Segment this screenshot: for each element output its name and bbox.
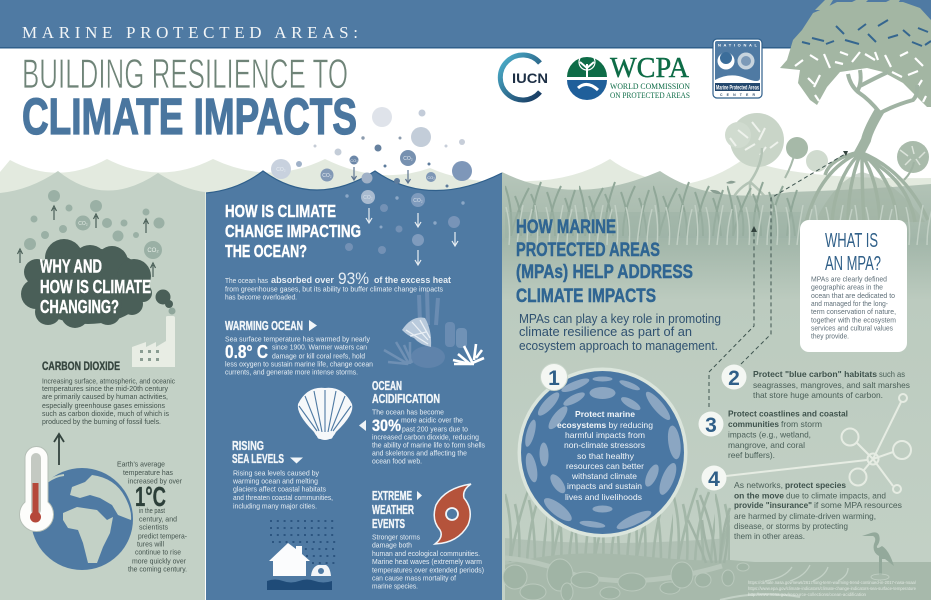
icon: flooded house xyxy=(267,521,336,590)
badge: 1: 1 xyxy=(548,367,560,390)
text: rising sea levels: glaciers affect coastal habitats xyxy=(233,484,326,494)
arrow: dashed line to grass xyxy=(709,154,845,407)
text: ocean acidification: The ocean has become xyxy=(372,408,444,416)
text: rising sea levels xyxy=(232,439,333,510)
icon: heron xyxy=(862,532,894,580)
text: earth temperature: predict tempera- xyxy=(138,532,187,540)
heading: how is climate change xyxy=(225,201,361,261)
text: rising sea levels: including many major cities. xyxy=(233,502,317,510)
text: ocean acidification: and skeletons and affecting the xyxy=(372,448,467,458)
bubbles: CO2 in ocean xyxy=(345,190,465,254)
text: ocean acidification: increased carbon dioxide, reducing xyxy=(372,432,479,442)
text: ocean absorbed: from greenhouse gases, but its ability to buffer climate change impacts xyxy=(225,284,443,294)
text: item 4 networks: protect species xyxy=(785,481,846,490)
text: ocean absorbed: of the excess heat xyxy=(374,275,451,285)
title: CLIMATE IMPACTS xyxy=(22,88,357,145)
text: carbon dioxide: especially greenhouse gases emissions xyxy=(42,401,165,410)
text: protect marine ecosystems: ecosystems by reducing xyxy=(557,420,653,430)
heading: how MPAs help: (MPAs) HELP ADDRESS xyxy=(516,261,693,283)
text: rising sea levels: and threaten coastal communities, xyxy=(233,493,333,502)
heading: how MPAs help: CLIMATE IMPACTS xyxy=(516,285,656,307)
arrow: shell pointer xyxy=(359,420,366,431)
text: warming ocean: less oxygen to sustain marine life, change ocean xyxy=(225,360,373,368)
text: ocean acidification: ocean food web. xyxy=(372,456,422,466)
text: ocean absorbed: has become overloaded. xyxy=(225,292,297,302)
text: earth temperature: scientists xyxy=(139,522,168,532)
logo: national marine protected areas center xyxy=(713,39,762,98)
text: item 4 networks: if some MPA resources xyxy=(814,501,902,510)
heading: how MPAs help: PROTECTED AREAS xyxy=(516,239,660,261)
text: warming ocean: 0.8° C xyxy=(225,342,268,362)
text: item 2 blue carbon xyxy=(753,370,910,400)
bubbles: CO2 above ocean: CO₂ xyxy=(350,158,358,163)
text: rising sea levels: Rising sea levels caused by xyxy=(233,468,319,478)
bubbles: CO2 rising: CO₂ xyxy=(78,221,88,227)
badge: 3: 3 xyxy=(705,414,717,437)
text: ocean absorbed xyxy=(225,270,451,302)
text: item 3 coastlines xyxy=(728,410,848,460)
icon: thermometer xyxy=(20,446,53,532)
icon: shell xyxy=(298,388,352,440)
text: rising sea levels: SEA LEVELS xyxy=(232,452,284,466)
grass: marsh base with light blades xyxy=(505,205,931,245)
arrows: CO2 rising upward xyxy=(18,206,156,277)
text: protect marine ecosystems: resources can better xyxy=(566,461,644,471)
text: protect marine ecosystems: non-climate stressors xyxy=(564,440,645,450)
text: item 3 coastlines: communities xyxy=(728,420,779,429)
panel: what is an MPA: and managed for the long- xyxy=(811,299,888,308)
panel: what is an MPA: WHAT IS xyxy=(825,230,878,252)
text: extreme weather xyxy=(372,489,484,590)
bubbles: CO2 above ocean: CO₂ xyxy=(427,175,435,180)
text: MPA intro: MPAs can play a key role in promoting xyxy=(519,312,721,326)
diagram: MPA network xyxy=(726,394,911,493)
title: MARINE PROTECTED AREAS: xyxy=(22,23,358,42)
header band xyxy=(0,0,931,48)
text: extreme weather: human and ecological communities. xyxy=(372,549,480,558)
plant: seagrass by 4 xyxy=(688,495,730,563)
text: extreme weather: marine species. xyxy=(372,582,418,590)
text: earth temperature: increased by over xyxy=(128,476,182,486)
badge: 1 xyxy=(540,364,568,390)
text: extreme weather: can cause mass mortality of xyxy=(372,574,457,582)
text: earth temperature: tures will xyxy=(137,540,164,548)
text: item 4 networks: As networks, xyxy=(734,481,783,490)
bubbles: CO2 rising: CO₂ xyxy=(147,248,159,254)
bubbles: CO2 above ocean xyxy=(271,107,472,188)
text: item 2 blue carbon: such as xyxy=(879,370,905,379)
text: carbon dioxide: Increasing surface, atmospheric, and oceanic xyxy=(42,376,175,386)
text: ocean absorbed: 93% xyxy=(338,270,369,288)
text: earth temperature: more quickly over xyxy=(132,556,186,566)
text: ocean acidification: more acidic over the xyxy=(401,416,463,424)
text: protect marine ecosystems xyxy=(557,409,653,502)
bubbles: CO2 rising xyxy=(24,190,164,259)
background waves xyxy=(0,158,931,240)
arrow: rising temperature xyxy=(54,434,64,465)
logo: WCPA: WCPA xyxy=(610,53,690,84)
text: protect marine ecosystems: harmful impacts from xyxy=(565,430,645,440)
heading: how MPAs help xyxy=(516,216,693,307)
text: earth temperature: Earth's average xyxy=(117,460,165,468)
panel: what is an MPA: geographic areas in the xyxy=(811,282,883,292)
badge: 4: 4 xyxy=(708,468,720,491)
text: extreme weather: EVENTS xyxy=(372,517,405,531)
bubbles: CO2 in ocean: CO₂ xyxy=(363,195,373,201)
text: carbon dioxide xyxy=(42,359,175,426)
logo: national marine protected areas center: CENTER xyxy=(720,93,755,97)
text: protect marine ecosystems: so that healthy xyxy=(577,451,635,461)
text: extreme weather: EXTREME xyxy=(372,489,412,503)
logo: WCPA: ON PROTECTED AREAS xyxy=(610,91,690,100)
text: item 3 coastlines: mangrove, and coral xyxy=(728,441,805,450)
badge: 2: 2 xyxy=(728,367,740,390)
text: sources: http://www.noaa.gov/resource-collections/ocean-acidification xyxy=(748,592,866,598)
text: item 4 networks: them in other areas. xyxy=(734,532,805,541)
panel: ocean background xyxy=(206,171,502,600)
logo: IUCN xyxy=(500,55,548,100)
text: protect marine ecosystems: withstand climate xyxy=(571,471,637,481)
panel: right background xyxy=(502,171,931,600)
text: item 4 networks: are harmed by climate-driven warming, xyxy=(734,512,876,521)
title xyxy=(22,23,358,145)
text: warming ocean: currents, and generate more intense storms. xyxy=(225,368,358,376)
text: item 2 blue carbon: seagrasses, mangroves, and salt marshes xyxy=(753,381,910,390)
badge: 2 xyxy=(722,364,746,390)
text: ocean acidification: past 200 years due to xyxy=(402,424,468,434)
text: protect marine ecosystems: impacts and sustain xyxy=(567,481,642,491)
text: item 3 coastlines: Protect coastlines and coastal xyxy=(728,410,848,418)
text: extreme weather: Marine heat waves (extremely warm xyxy=(372,557,482,566)
text: item 3 coastlines: from storm xyxy=(781,420,822,429)
text: ocean acidification xyxy=(372,379,485,466)
text: item 4 networks: on the move xyxy=(734,492,784,500)
text: earth temperature: century, and xyxy=(139,514,177,524)
text: earth temperature: continue to rise xyxy=(135,548,181,556)
panel: what is an MPA: together with the ecosystem xyxy=(811,316,896,324)
bubbles: CO2 in ocean: CO₂ xyxy=(413,198,423,204)
heading: how MPAs help: HOW MARINE xyxy=(516,216,616,238)
text: ocean absorbed: absorbed over xyxy=(271,275,334,285)
ocean wave line xyxy=(206,171,502,193)
arrows: CO2 absorbed downward xyxy=(352,167,458,265)
bubbles: CO2 above ocean: CO₂ xyxy=(276,167,286,173)
big mangrove tree xyxy=(780,0,931,222)
heading: why and how: CHANGING? xyxy=(40,297,119,317)
seabed and oysters xyxy=(503,553,931,600)
text: MPA intro: climate resilience as part of an xyxy=(519,325,692,339)
icon: globe xyxy=(31,468,133,570)
text: warming ocean xyxy=(225,319,373,376)
grass: upper dark blades xyxy=(505,178,801,236)
text: extreme weather: damage both xyxy=(372,540,412,550)
text: earth temperature xyxy=(117,460,187,574)
bubbles: CO2 above ocean: CO₂ xyxy=(403,156,413,162)
badge: 4 xyxy=(702,466,726,491)
text: ocean acidification: 30% xyxy=(372,416,401,435)
text: item 4 networks: due to climate impacts, and xyxy=(786,492,886,500)
heading: how is climate change: THE OCEAN? xyxy=(225,241,307,261)
text: extreme weather: temperatures over extended periods) xyxy=(372,566,484,574)
heading: why and how xyxy=(40,256,151,317)
text: ocean acidification: ACIDIFICATION xyxy=(372,392,440,406)
text: warming ocean: since 1900. Warmer waters can xyxy=(272,342,367,352)
heading: why and how: WHY AND xyxy=(40,256,102,276)
text: ocean acidification: OCEAN xyxy=(372,379,402,393)
text: MPA intro xyxy=(519,312,721,353)
text: ocean absorbed: The ocean has xyxy=(225,276,268,285)
badge: 3 xyxy=(698,412,724,437)
text: item 4 networks xyxy=(734,481,902,541)
panel: what is an MPA xyxy=(800,220,907,352)
text: item 2 blue carbon: Protect "blue carbon" habitats xyxy=(753,370,877,379)
panel: what is an MPA: AN MPA? xyxy=(825,253,881,275)
logo: IUCN: IUCN xyxy=(512,70,548,86)
arrowheads xyxy=(751,151,848,232)
title: BUILDING RESILIENCE TO xyxy=(22,50,348,97)
logo: WCPA: WORLD COMMISSION xyxy=(610,82,690,91)
text: warming ocean: damage or kill coral reefs, hold xyxy=(272,352,365,360)
panel: what is an MPA: term conservation of nature, xyxy=(811,307,896,316)
icon: hurricane xyxy=(434,484,471,544)
logo: WCPA xyxy=(567,53,690,100)
fish near grass xyxy=(710,181,736,194)
panel: what is an MPA: services and cultural values xyxy=(811,324,893,332)
text: earth temperature: in the past xyxy=(139,506,166,515)
panel: what is an MPA: MPAs are clearly defined xyxy=(811,274,887,284)
text: earth temperature: temperature has xyxy=(123,468,173,477)
text: item 3 coastlines: reef buffers). xyxy=(728,451,775,460)
text: carbon dioxide: are primarily caused by human activities, xyxy=(42,392,168,401)
icon: factory xyxy=(132,316,175,367)
text: rising sea levels: warming ocean and melting xyxy=(232,476,318,486)
text: carbon dioxide: temperatures since the mid-20th century xyxy=(42,384,168,393)
text: carbon dioxide: such as carbon dioxide, much of which is xyxy=(42,409,169,418)
bubbles: CO2 above ocean: CO₂ xyxy=(322,173,332,179)
text: earth temperature: 1°C xyxy=(135,481,166,512)
text: earth temperature: the coming century. xyxy=(128,564,187,574)
icon: coral xyxy=(384,292,484,368)
cloud xyxy=(21,239,176,328)
text: warming ocean: Sea surface temperature has warmed by nearly xyxy=(225,334,370,344)
text: sources xyxy=(748,580,917,598)
logo: national marine protected areas center: Marine Protected Areas xyxy=(716,86,759,92)
text: MPA intro: ecosystem approach to management. xyxy=(519,339,718,353)
panel: what is an MPA: they provide. xyxy=(811,332,849,340)
text: rising sea levels: RISING xyxy=(232,439,264,453)
text: extreme weather: Stronger storms xyxy=(372,532,420,542)
text: item 4 networks: disease, or storms by protecting xyxy=(734,522,848,531)
heading: how is climate change: HOW IS CLIMATE xyxy=(225,201,336,221)
text: extreme weather: WEATHER xyxy=(372,503,414,517)
text: protect marine ecosystems: Protect marine xyxy=(575,409,635,419)
text: warming ocean: WARMING OCEAN xyxy=(225,319,303,333)
heading: how is climate change: CHANGE IMPACTING xyxy=(225,221,361,241)
panel: circle 1 fish school xyxy=(518,368,688,538)
text: item 2 blue carbon: that store huge amounts of carbon. xyxy=(753,391,883,400)
text: protect marine ecosystems: lives and livelihoods xyxy=(565,492,642,502)
grass: lower seagrass xyxy=(505,482,730,565)
text: item 4 networks: provide "insurance" xyxy=(734,501,812,510)
small mangrove trees xyxy=(725,113,929,205)
panel: what is an MPA: ocean that are dedicated to xyxy=(811,291,895,300)
heading: why and how: HOW IS CLIMATE xyxy=(40,277,151,297)
panel: why and how background xyxy=(0,171,205,600)
text: item 3 coastlines: impacts (e.g., wetland, xyxy=(728,430,811,440)
logo: national marine protected areas center: NATIONAL xyxy=(718,42,758,48)
text: carbon dioxide: produced by the burning of fossil fuels. xyxy=(42,417,161,426)
text: carbon dioxide: CARBON DIOXIDE xyxy=(42,359,120,373)
text: ocean acidification: the ability of marine life to form shells xyxy=(372,440,485,450)
